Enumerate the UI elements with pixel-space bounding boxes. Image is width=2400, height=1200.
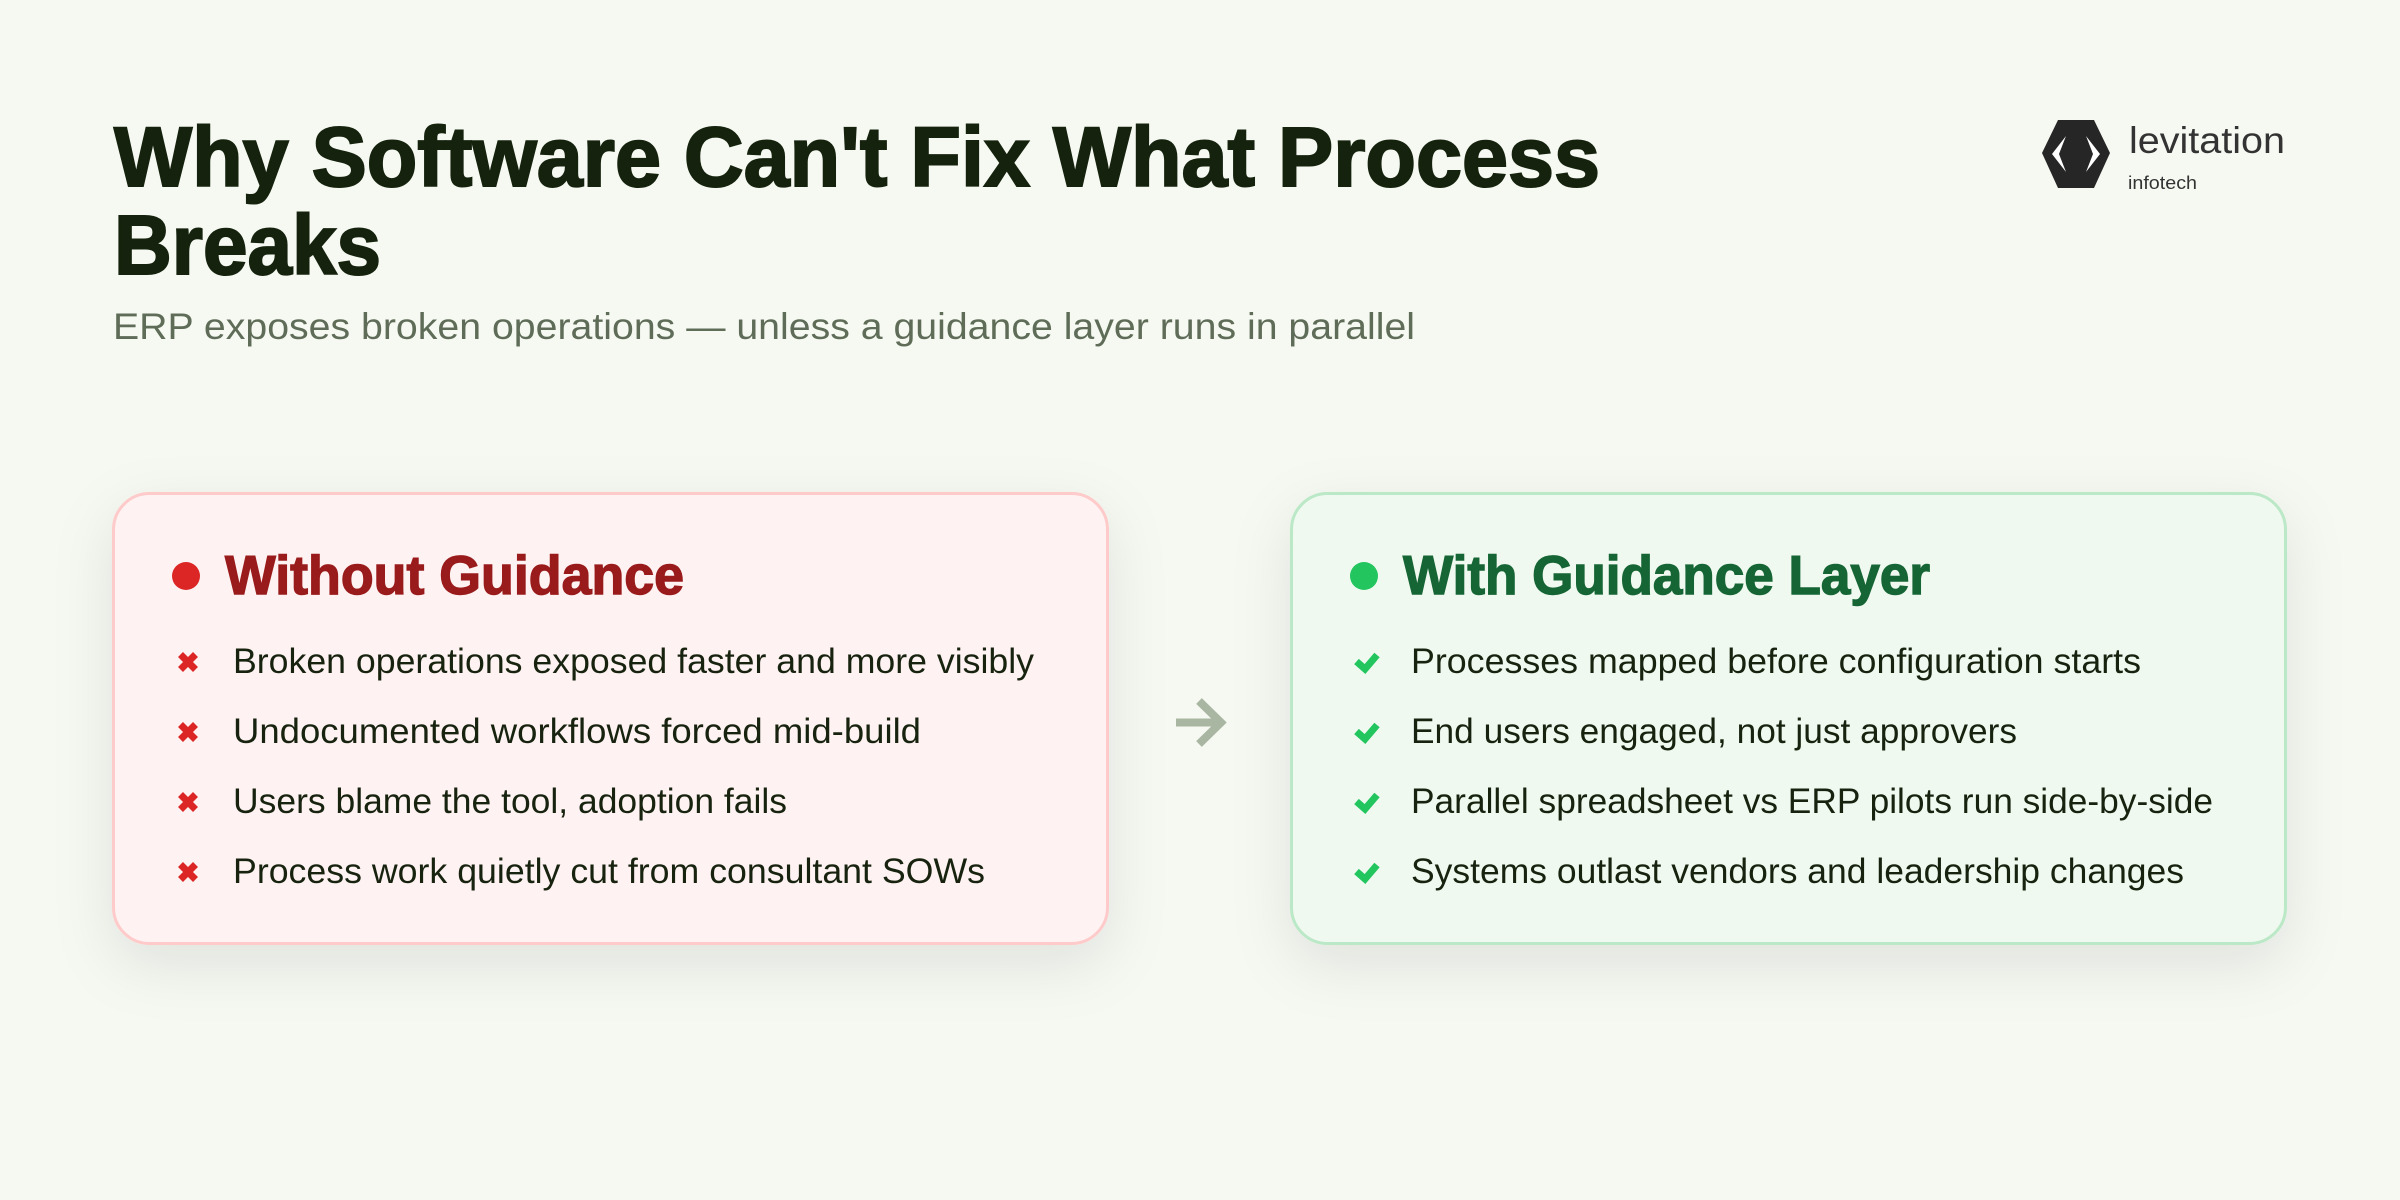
title: Why Software Can't Fix What Process [114, 110, 1600, 204]
panel: with guidance layer [1292, 494, 2286, 944]
panel: without guidance [114, 494, 1108, 944]
title: Breaks [114, 198, 381, 292]
status dot: green [1350, 562, 1378, 590]
arrow [1176, 701, 1221, 744]
status dot: red [172, 562, 200, 590]
heading: without guidance: Without Guidance [225, 544, 684, 606]
list row 1: Processes mapped before configuration starts [1411, 641, 2141, 681]
logo sub-wordmark: infotech [2128, 173, 2197, 193]
list row 2: Undocumented workflows forced mid-build [233, 711, 921, 751]
logo wordmark: levitation [2129, 120, 2285, 161]
title [114, 110, 1600, 292]
icon: hexagon logo mark [2042, 120, 2110, 188]
list row 4: Systems outlast vendors and leadership changes [1411, 851, 2184, 891]
list row 1: Broken operations exposed faster and more visibly [233, 641, 1034, 681]
list row 3: Parallel spreadsheet vs ERP pilots run side-by-side [1411, 781, 2213, 821]
subtitle: ERP exposes broken operations — unless a guidance layer runs in parallel [113, 305, 1415, 347]
list row 2: End users engaged, not just approvers [1411, 711, 2017, 751]
list row 4: Process work quietly cut from consultant SOWs [233, 851, 985, 891]
heading: with guidance layer: With Guidance Layer [1403, 544, 1930, 606]
list row 3: Users blame the tool, adoption fails [233, 781, 787, 821]
logo: levitation infotech [2042, 120, 2285, 193]
